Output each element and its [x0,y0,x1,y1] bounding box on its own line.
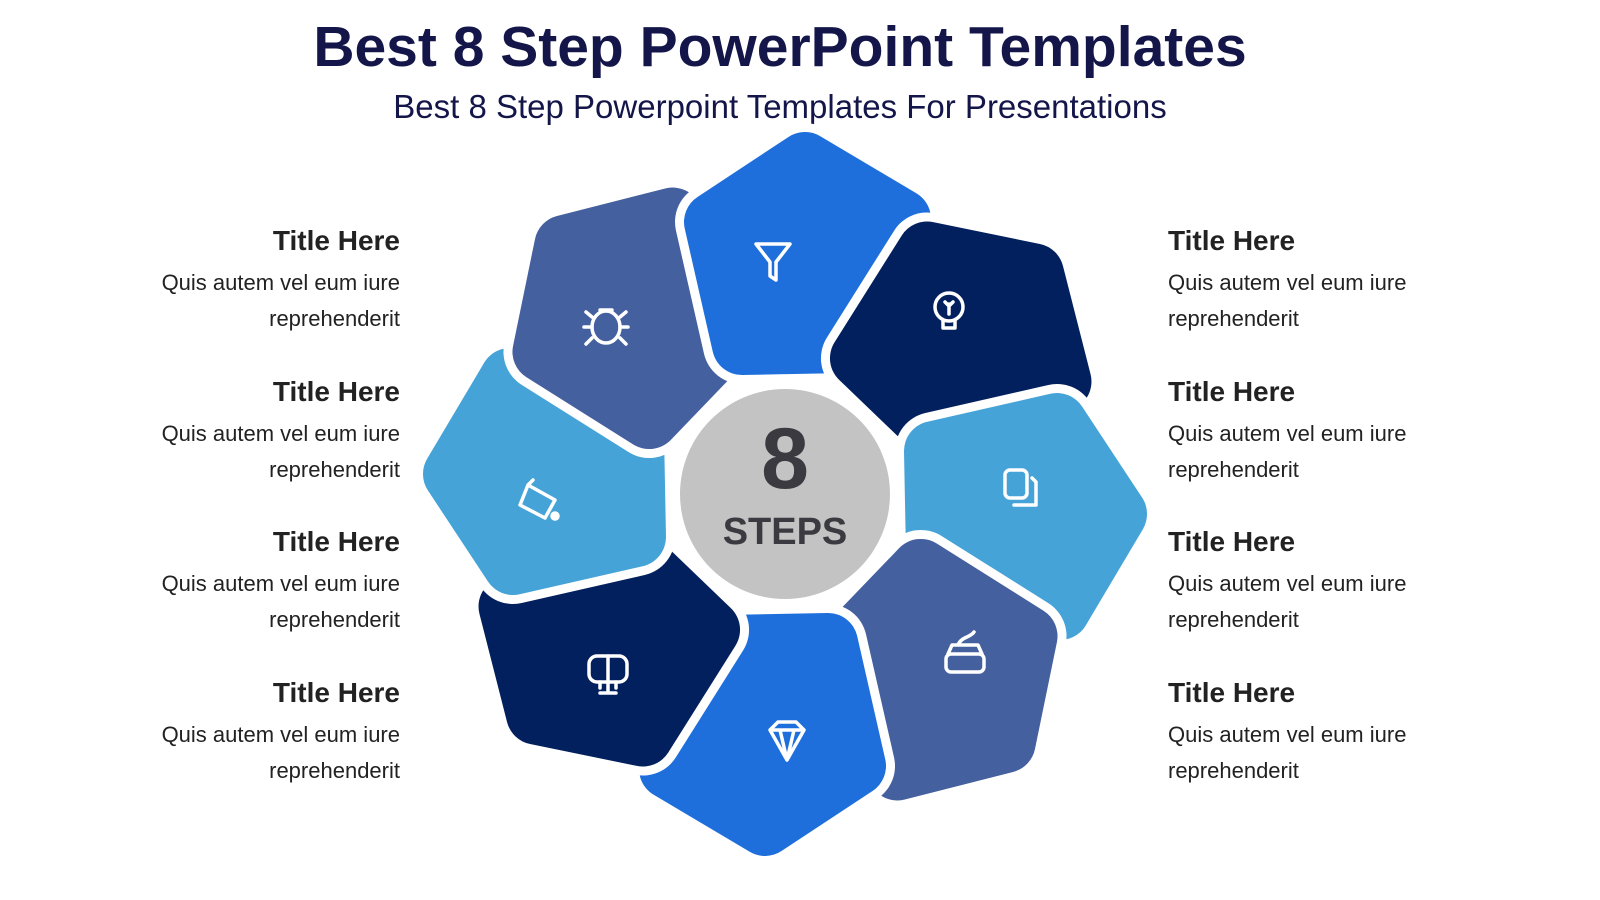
right item 1 [1168,225,1406,331]
segment 6 bottom-left [468,517,730,779]
title: Best 8 Step PowerPoint Templates [313,15,1247,79]
left item 4: Title Here [273,677,400,708]
diagram [423,124,1147,856]
right item 4: Quis autem vel eum iure reprehenderit [1168,722,1406,783]
right item 3: Quis autem vel eum iure reprehenderit [1168,571,1406,632]
icon: bulb [935,293,963,328]
right item 1: Quis autem vel eum iure reprehenderit [1168,270,1406,331]
left item 2: Title Here [273,376,400,407]
segment 3 right [934,423,1117,610]
right item 2: Title Here [1168,376,1295,407]
left item 4: Quis autem vel eum iure reprehenderit [162,722,400,783]
left item 3: Title Here [273,526,400,557]
center circle: STEPS [723,511,847,553]
icon: funnel [756,244,790,280]
left item 2 [162,376,400,482]
left item 1: Quis autem vel eum iure reprehenderit [162,270,400,331]
icons [520,244,1036,760]
segment 4 bottom-right [808,549,1070,811]
right item 2 [1168,376,1406,482]
icon: documents [1005,470,1036,505]
center circle [680,389,890,599]
left item 2: Quis autem vel eum iure reprehenderit [162,421,400,482]
right item 3 [1168,526,1406,632]
right item 4 [1168,677,1406,783]
icon: diamond [770,722,804,760]
segment 8 top-left [500,177,762,439]
left item 3 [162,526,400,632]
right item 4: Title Here [1168,677,1295,708]
left item 1 [162,225,400,331]
right item 2: Quis autem vel eum iure reprehenderit [1168,421,1406,482]
segment 1 overlap over top-left [675,139,785,382]
left item 1: Title Here [273,225,400,256]
left item 4 [162,677,400,783]
segment 7 left [453,378,636,565]
icon: brain monitor [589,656,627,693]
right item 1: Title Here [1168,225,1295,256]
center circle: 8 [761,411,809,507]
icon: paint bucket [520,480,558,519]
subtitle: Best 8 Step Powerpoint Templates For Presentations [393,88,1167,125]
icon: bug [584,310,628,344]
left item 3: Quis autem vel eum iure reprehenderit [162,571,400,632]
segment 5 bottom [669,643,856,826]
right item 3: Title Here [1168,526,1295,557]
icon: cream jar [946,632,984,672]
segment 2 top-right [840,209,1102,471]
segment 1 top [714,162,901,345]
